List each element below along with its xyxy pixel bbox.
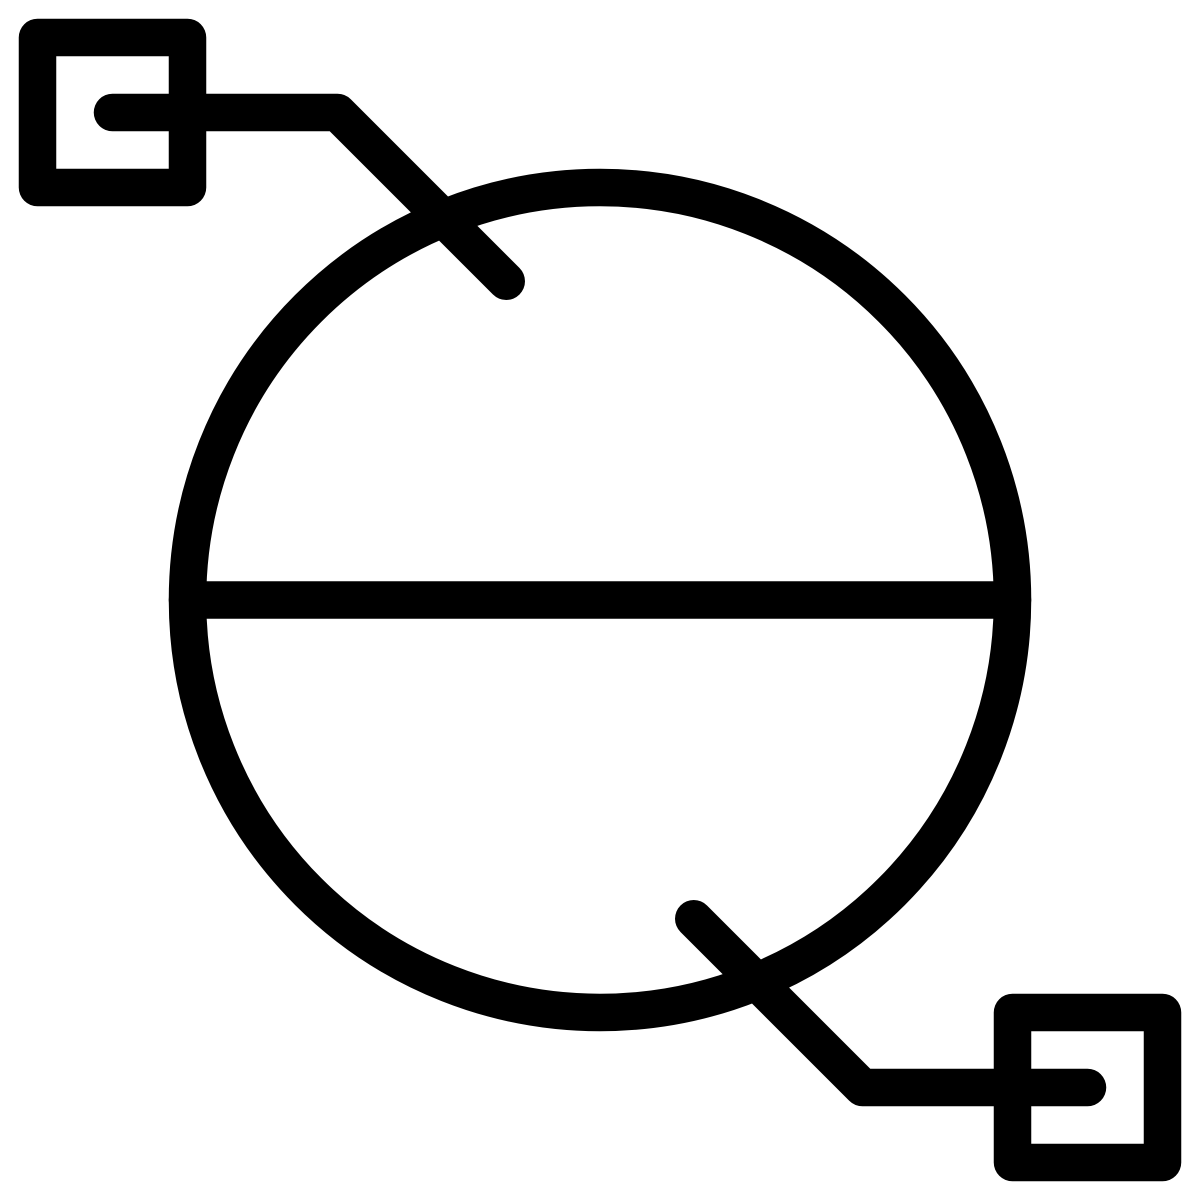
main circle [188,188,1012,1012]
bottom-right square terminal [1012,1012,1162,1162]
top-left lead line [112,112,506,281]
top-left square terminal [38,38,188,188]
bottom-right lead line [694,919,1088,1088]
horizontal bar across circle [188,581,1012,619]
